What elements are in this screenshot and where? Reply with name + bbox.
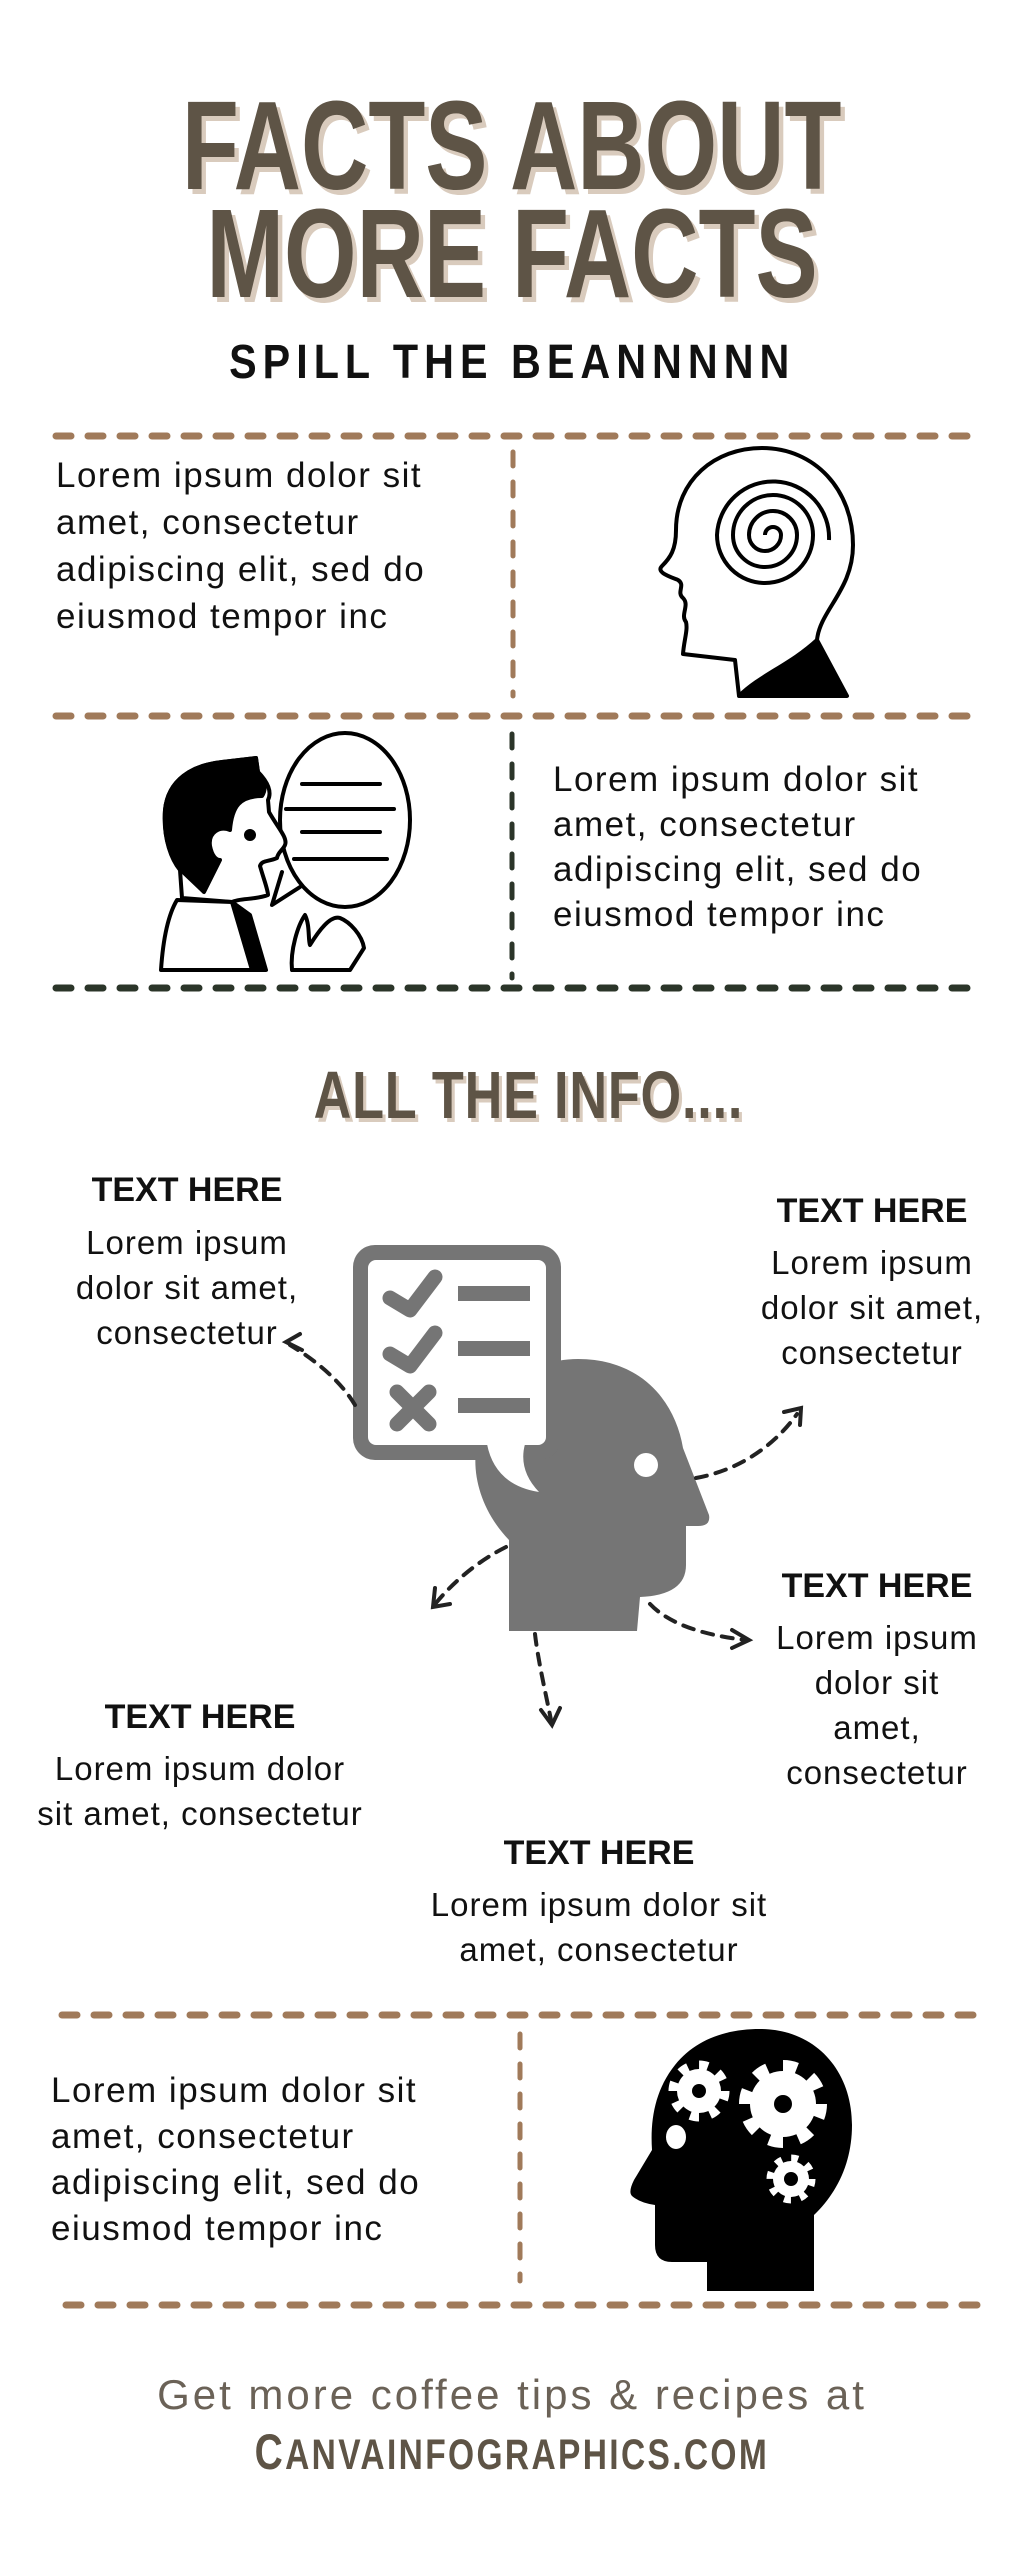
icon: talking man (161, 733, 410, 970)
item 1: dolor sit amet, (76, 1269, 298, 1306)
item 1: consectetur (96, 1314, 278, 1351)
icon: head with gears (630, 2029, 852, 2291)
item 5: TEXT HERE (504, 1834, 694, 1872)
text block: panel 2 (553, 760, 922, 934)
item 2: dolor sit amet, (761, 1289, 983, 1326)
text block: panel 3: adipiscing elit, sed do (51, 2163, 420, 2202)
text block: panel 3: amet, consectetur (51, 2117, 355, 2156)
text block: panel 2: eiusmod tempor inc (553, 895, 885, 934)
item 5: Lorem ipsum dolor sit (431, 1886, 767, 1923)
footer url: CANVAINFOGRAPHICS.COM (255, 2424, 769, 2480)
item 3: Lorem ipsum (776, 1619, 978, 1656)
item 1: TEXT HERE (92, 1171, 282, 1209)
text block: panel 1 (56, 456, 425, 636)
item 3: dolor sit (815, 1664, 939, 1701)
item 1 (76, 1171, 298, 1351)
item 4: Lorem ipsum dolor (55, 1750, 345, 1787)
text block: panel 2: amet, consectetur (553, 805, 857, 844)
item 1: Lorem ipsum (86, 1224, 288, 1261)
item 3 (776, 1567, 978, 1791)
item 4: TEXT HERE (105, 1698, 295, 1736)
item 2: Lorem ipsum (771, 1244, 973, 1281)
subtitle: SPILL THE BEANNNNN (229, 336, 795, 389)
arrows (286, 1334, 801, 1725)
text block: panel 1: adipiscing elit, sed do (56, 550, 425, 589)
item 4 (37, 1698, 363, 1832)
text block: panel 3: Lorem ipsum dolor sit (51, 2071, 417, 2110)
item 3: consectetur (786, 1754, 968, 1791)
item 2 (761, 1192, 983, 1371)
item 3: TEXT HERE (782, 1567, 972, 1605)
text block: panel 2: Lorem ipsum dolor sit (553, 760, 919, 799)
icon: head with checklist (353, 1245, 709, 1631)
item 5: amet, consectetur (459, 1931, 739, 1968)
item 2: consectetur (781, 1334, 963, 1371)
item 5 (431, 1834, 767, 1968)
text block: panel 1: eiusmod tempor inc (56, 597, 388, 636)
item 4: sit amet, consectetur (37, 1795, 363, 1832)
text block: panel 1: Lorem ipsum dolor sit (56, 456, 422, 495)
footer text: Get more coffee tips & recipes at (157, 2371, 867, 2418)
icon: spiral head (660, 448, 853, 696)
title (182, 75, 845, 324)
heading: all the info: ALL THE INFO.... (313, 1058, 743, 1133)
text block: panel 1: amet, consectetur (56, 503, 360, 542)
title: FACTS ABOUT (182, 75, 842, 216)
text block: panel 2: adipiscing elit, sed do (553, 850, 922, 889)
item 2: TEXT HERE (777, 1192, 967, 1230)
text block: panel 3: eiusmod tempor inc (51, 2209, 383, 2248)
item 3: amet, (833, 1709, 921, 1746)
title: MORE FACTS (206, 183, 818, 324)
text block: panel 3 (51, 2071, 420, 2248)
